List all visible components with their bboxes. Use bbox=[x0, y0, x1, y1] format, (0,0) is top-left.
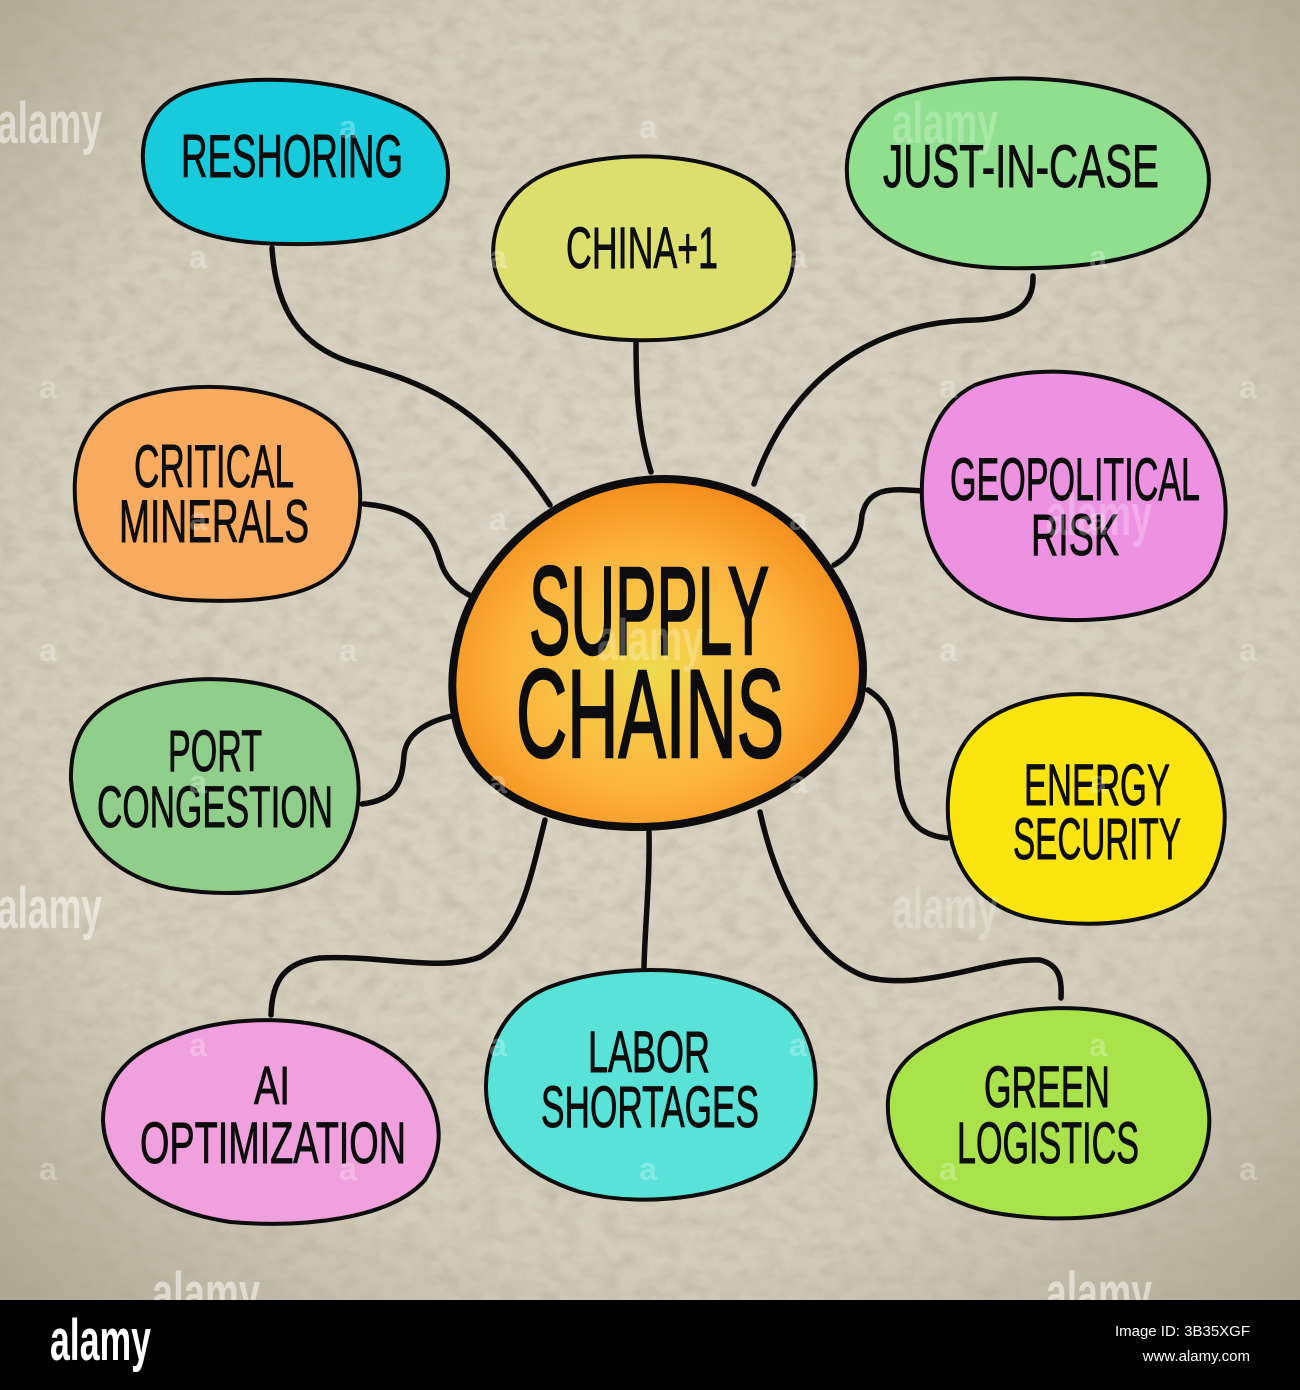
bubble: Labor shortages bbox=[486, 970, 816, 1200]
small tiled marks: a bbox=[489, 764, 507, 800]
bubble: Port congestion: CONGESTION bbox=[97, 775, 333, 840]
small tiled marks: a bbox=[1089, 764, 1107, 800]
small tiled marks: a bbox=[189, 501, 207, 537]
watermarks: alamy bbox=[1046, 1261, 1152, 1326]
small tiled marks bbox=[39, 109, 1257, 1187]
bubble: Geopolitical risk: RISK bbox=[1031, 503, 1119, 568]
bubble: Labor shortages: SHORTAGES bbox=[541, 1075, 759, 1140]
small tiled marks: a bbox=[39, 632, 57, 668]
bubble: Critical minerals: CRITICAL bbox=[134, 433, 294, 500]
small tiled marks: a bbox=[789, 501, 807, 537]
bubble: Critical minerals bbox=[75, 387, 360, 601]
bubble: Labor shortages: LABOR bbox=[588, 1020, 710, 1085]
watermarks: alamy bbox=[0, 91, 102, 156]
connector lines bbox=[271, 248, 1061, 1015]
bubble: Port congestion bbox=[71, 679, 359, 893]
watermarks: alamy bbox=[597, 608, 703, 673]
small tiled marks: a bbox=[1089, 501, 1107, 537]
small tiled marks: a bbox=[789, 1027, 807, 1063]
small tiled marks: a bbox=[339, 1151, 357, 1187]
bubble: Green logistics: LOGISTICS bbox=[957, 1111, 1139, 1176]
watermarks: alamy bbox=[1046, 483, 1152, 548]
watermarks: alamy bbox=[892, 91, 998, 156]
bubble: AI optimization bbox=[103, 1020, 439, 1224]
bubble: Port congestion: PORT bbox=[168, 719, 262, 784]
bubble: Energy security: ENERGY bbox=[1024, 753, 1170, 818]
footer logo: alamy bbox=[50, 1308, 151, 1373]
footer image id: Image ID: 3B35XGF bbox=[1115, 1323, 1250, 1340]
small tiled marks: a bbox=[1089, 1027, 1107, 1063]
bubble: China+1: CHINA+1 bbox=[566, 216, 718, 281]
small tiled marks: a bbox=[939, 632, 957, 668]
bubble: China+1 bbox=[493, 156, 794, 340]
small tiled marks: a bbox=[1239, 369, 1257, 405]
small tiled marks: a bbox=[1239, 1151, 1257, 1187]
bubble: AI optimization: AI bbox=[254, 1056, 290, 1116]
footer bar bbox=[0, 1300, 1300, 1390]
central bubble: Supply Chains bbox=[452, 479, 863, 827]
bubble: Green logistics bbox=[888, 1008, 1209, 1218]
bubble: Just-in-case: JUST-IN-CASE bbox=[883, 133, 1159, 200]
small tiled marks: a bbox=[189, 1027, 207, 1063]
bubble: Energy security bbox=[948, 694, 1225, 924]
bubble: Energy security: SECURITY bbox=[1013, 807, 1181, 872]
bubble: Just-in-case bbox=[847, 78, 1209, 268]
small tiled marks: a bbox=[789, 764, 807, 800]
small tiled marks: a bbox=[1239, 632, 1257, 668]
bubble: Critical minerals: MINERALS bbox=[119, 488, 309, 555]
central bubble: Supply Chains: CHAINS bbox=[516, 645, 784, 784]
bubble: Reshoring bbox=[143, 80, 448, 244]
small tiled marks: a bbox=[1089, 239, 1107, 275]
small tiled marks: a bbox=[339, 109, 357, 145]
small tiled marks: a bbox=[39, 1151, 57, 1187]
watermarks: alamy bbox=[152, 1261, 260, 1326]
footer url: www.alamy.com bbox=[1142, 1348, 1250, 1365]
central bubble: Supply Chains: SUPPLY bbox=[529, 542, 769, 681]
bubble: Geopolitical risk bbox=[922, 372, 1226, 620]
small tiled marks: a bbox=[489, 1027, 507, 1063]
small tiled marks: a bbox=[639, 109, 657, 145]
bubble: Green logistics: GREEN bbox=[984, 1055, 1110, 1120]
bubble: Reshoring: RESHORING bbox=[181, 123, 403, 190]
watermarks: alamy bbox=[892, 876, 998, 941]
small tiled marks: a bbox=[489, 239, 507, 275]
small tiled marks: a bbox=[489, 501, 507, 537]
small tiled marks: a bbox=[339, 632, 357, 668]
small tiled marks: a bbox=[789, 239, 807, 275]
small tiled marks: a bbox=[189, 239, 207, 275]
small tiled marks: a bbox=[39, 369, 57, 405]
small tiled marks: a bbox=[639, 1151, 657, 1187]
bubble: AI optimization: OPTIMIZATION bbox=[140, 1111, 406, 1176]
small tiled marks: a bbox=[939, 369, 957, 405]
small tiled marks: a bbox=[189, 764, 207, 800]
small tiled marks: a bbox=[939, 1151, 957, 1187]
watermarks: alamy bbox=[0, 876, 102, 941]
